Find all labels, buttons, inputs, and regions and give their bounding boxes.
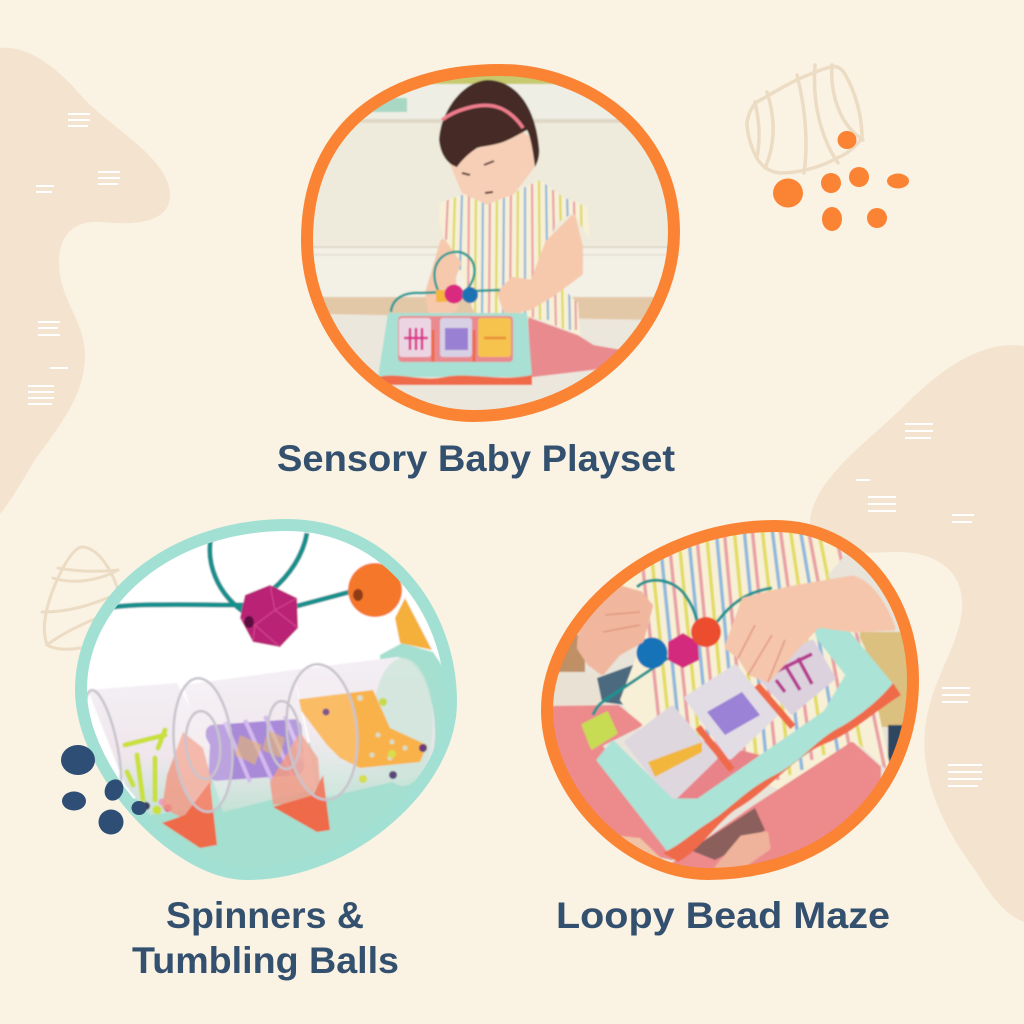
- heading: loopy bead maze: Loopy Bead Maze: [556, 895, 890, 936]
- child dress: [439, 180, 590, 335]
- right stand: [270, 732, 330, 832]
- child legs: [530, 320, 627, 375]
- heading: spinners and tumbling balls: [132, 895, 399, 981]
- beads: [636, 617, 721, 668]
- mid tube: [183, 670, 317, 812]
- toy wavy edge: [378, 375, 532, 385]
- dress: [605, 528, 892, 790]
- left hand: [580, 587, 650, 672]
- photo content: toy held on lap: [540, 515, 920, 885]
- right pink leg: [670, 745, 878, 878]
- heading: sensory baby playset: Sensory Baby Playset: [277, 438, 675, 479]
- photo content: spinner tubes: [87, 531, 445, 868]
- toy cutout: [398, 316, 513, 362]
- magenta bead: [240, 585, 298, 647]
- purple spinner: [205, 716, 305, 782]
- orb hole: [353, 589, 363, 601]
- decorative blob: right: [810, 345, 1024, 922]
- tube rims: [78, 661, 363, 814]
- left stand: [162, 732, 217, 848]
- right background: [860, 632, 920, 727]
- rug: [545, 672, 605, 712]
- heading: spinners and tumbling balls: Tumbling Balls: [132, 940, 399, 981]
- yellow block: [395, 598, 432, 650]
- near tube: [88, 683, 210, 815]
- toy tray: [598, 627, 893, 850]
- decorative blob: left: [0, 48, 170, 514]
- heading: spinners and tumbling balls: Spinners &: [166, 895, 364, 936]
- toy cutout shade: [672, 740, 760, 800]
- wire: [108, 533, 357, 616]
- baseboard: [313, 246, 667, 296]
- foot: [717, 834, 768, 872]
- toy wavy edge: [663, 683, 901, 862]
- icon: sketched shell left: [42, 547, 118, 649]
- green cube: [583, 713, 616, 748]
- window ledge: [360, 76, 621, 123]
- wire: [593, 580, 772, 715]
- thigh skin: [612, 835, 665, 875]
- denim: [597, 658, 652, 708]
- coral dividers: [698, 685, 793, 770]
- wall: [313, 122, 668, 244]
- drums: [627, 642, 833, 800]
- toy wire: [391, 252, 500, 312]
- right arm and hand: [727, 578, 893, 680]
- toy beads: [436, 284, 478, 304]
- lime spinner: [125, 730, 165, 800]
- face: [450, 132, 533, 203]
- shadow: [690, 808, 765, 860]
- rug: [330, 314, 642, 410]
- finger creases: [603, 612, 785, 682]
- facial features: [462, 161, 494, 193]
- small balls: [142, 798, 172, 814]
- arms: [428, 218, 580, 323]
- orange orb: [348, 563, 402, 617]
- photo content: child with playset: [313, 76, 668, 410]
- orange plate: [293, 690, 427, 783]
- floor: [545, 635, 585, 673]
- photo: spinners and tumbling balls: [70, 515, 465, 885]
- teal base: [133, 642, 445, 868]
- icon: sketched barrel top right: [747, 65, 863, 173]
- photo: loopy bead maze: [540, 515, 920, 885]
- photo: sensory baby playset: [300, 60, 685, 430]
- toy base: [378, 313, 532, 377]
- headband: [442, 105, 523, 128]
- toy drums: [399, 318, 511, 362]
- hand: [501, 282, 535, 310]
- far tube: [293, 657, 435, 798]
- hair: [439, 80, 539, 167]
- icon: orange dots top right: [773, 131, 909, 231]
- navy jeans: [888, 725, 918, 785]
- far tube end: [373, 658, 433, 786]
- icon: navy dots: [61, 745, 146, 834]
- left pink leg: [548, 707, 672, 858]
- floor: [323, 296, 654, 320]
